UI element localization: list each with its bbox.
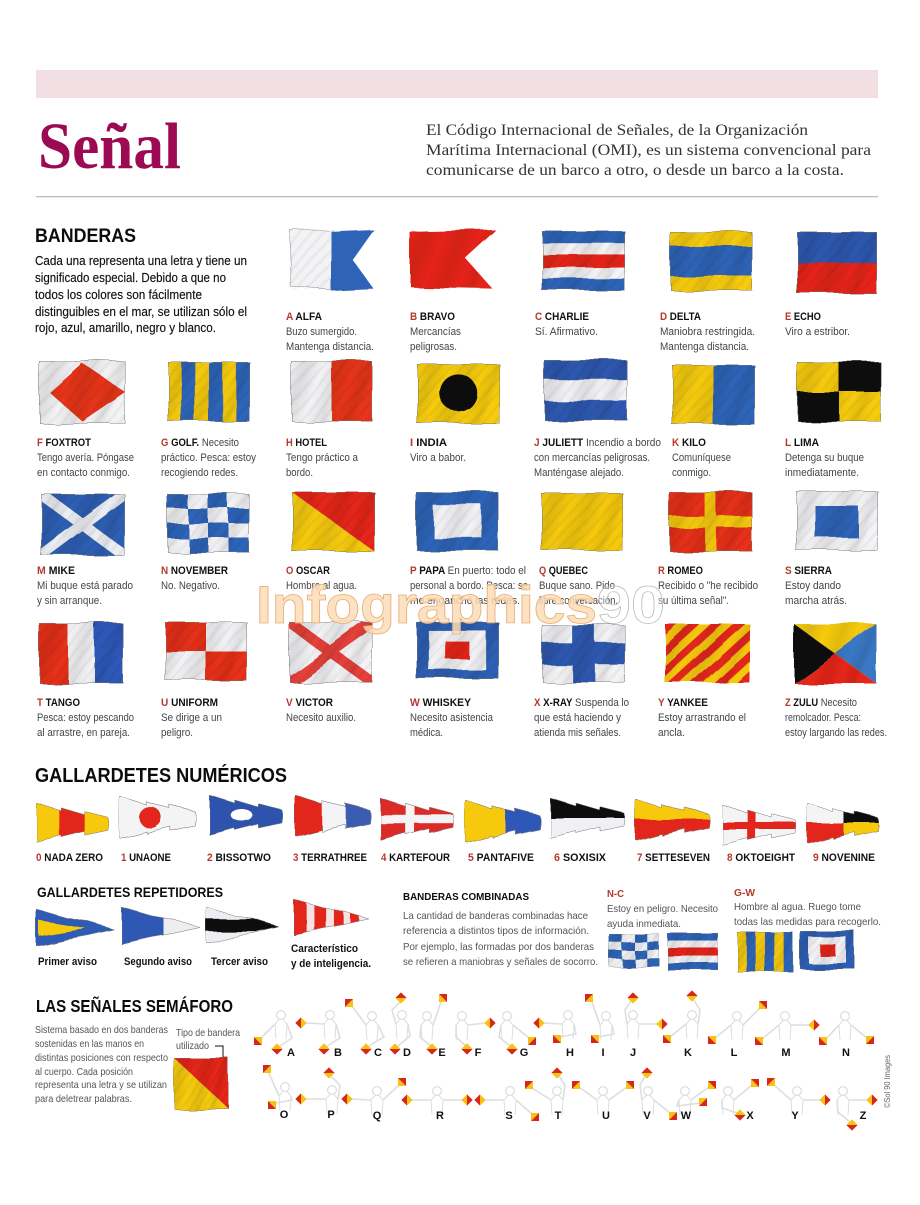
semaphore U: U: [602, 1110, 610, 1122]
flag card: S: [785, 491, 878, 607]
flag card: P: personal a bordo. Pesca: se: [410, 580, 528, 592]
flag card: I: [410, 364, 500, 464]
flag card: M: [37, 494, 133, 607]
flag card: A: [286, 229, 374, 353]
semaphore K: [663, 990, 700, 1059]
text block: semaforo: para deletrear palabras.: [35, 1093, 132, 1105]
semaphore D: [389, 992, 411, 1059]
pennant 8: 8 OKTOEIGHT: [727, 852, 795, 864]
flag card: A: A ALFA: [286, 311, 322, 323]
flag card: U: peligro.: [161, 727, 193, 739]
text block: banderas intro: significado especial. Debido a que no: [35, 271, 226, 285]
combo: N-C: ayuda inmediata.: [607, 918, 681, 930]
flag card: V: V VICTOR: [286, 697, 333, 709]
flag card: F: F FOXTROT: [37, 437, 91, 449]
flag card: G: recogiendo redes.: [161, 467, 238, 479]
semaphore M: [755, 1012, 820, 1059]
combo: G-W: [734, 887, 881, 972]
watermark: Infographics: [256, 576, 597, 635]
pennant 0: [36, 803, 109, 864]
flag card: O: Hombre al agua.: [286, 580, 357, 592]
semaphore B: B: [334, 1047, 342, 1059]
semaphore D: D: [403, 1047, 411, 1059]
flag card: T: T TANGO: [37, 697, 80, 709]
pennant 9: [807, 803, 879, 864]
flag card: X: [534, 625, 629, 739]
flag card: C: Sí. Afirmativo.: [535, 326, 598, 338]
pennant 5: 5 PANTAFIVE: [468, 852, 534, 864]
combo: N-C: N-C: [607, 888, 624, 900]
heading: Banderas: BANDERAS: [35, 226, 136, 247]
semaphore H: [533, 1011, 576, 1059]
semaphore X: [722, 1079, 759, 1122]
flag card: L: Detenga su buque: [785, 452, 864, 464]
flag card: S: S SIERRA: [785, 565, 832, 577]
flag card: J: con mercancías peligrosas.: [534, 452, 650, 464]
pennant 6: 6 SOXISIX: [554, 852, 607, 864]
semaphore L: [708, 1001, 767, 1059]
flag card: D: [660, 232, 755, 353]
flag card: W: W WHISKEY: [410, 697, 472, 709]
flag card: U: [161, 622, 247, 739]
header band: [36, 70, 878, 98]
pennant 0: 0 NADA ZERO: [36, 852, 103, 864]
banderas combinadas text: La cantidad de banderas combinadas hace: [403, 910, 588, 922]
text block: semaforo: Sistema basado en dos banderas: [35, 1024, 168, 1036]
semaphore S: S: [505, 1110, 513, 1122]
semaphore F: [456, 1012, 496, 1059]
flag card: U: Se dirige a un: [161, 712, 222, 724]
semaphore B: [295, 1011, 342, 1059]
pennant 4: [380, 798, 454, 864]
flag card: D: Maniobra restringida.: [660, 326, 755, 338]
pennant 7: 7 SETTESEVEN: [637, 852, 710, 864]
flag card: X: atienda mis señales.: [534, 727, 621, 739]
semaphore P: P: [327, 1109, 335, 1121]
semaphore E: [420, 994, 447, 1059]
flag card: G: práctico. Pesca: estoy: [161, 452, 257, 464]
flag card: Z: Z ZULU Necesito: [785, 697, 857, 709]
semaphore M: M: [781, 1047, 791, 1059]
combo: N-C: Estoy en peligro. Necesito: [607, 903, 718, 915]
pennant 2: [207, 795, 283, 864]
repeater: segundo aviso: Segundo aviso: [124, 956, 192, 968]
flag card: R: R ROMEO: [658, 565, 703, 577]
semaphore G: G: [520, 1047, 528, 1059]
banderas combinadas text: referencia a distintos tipos de información.: [403, 925, 589, 937]
repeater: tercer aviso: [206, 907, 279, 968]
flag card: P: me enganchó las redes.: [410, 595, 520, 607]
pennant 6: [550, 798, 625, 864]
semaphore E: E: [438, 1047, 446, 1059]
semaphore U: [572, 1081, 634, 1122]
flag card: Y: Y YANKEE: [658, 697, 708, 709]
semaphore F: F: [475, 1047, 482, 1059]
flag card: K: Comuníquese: [672, 452, 731, 464]
pennant 7: [635, 799, 710, 864]
flag card: H: bordo.: [286, 467, 313, 479]
flag card: S: Estoy dando: [785, 580, 841, 592]
flag card: C: [535, 231, 625, 338]
flag card: F: Tengo avería. Póngase: [37, 452, 134, 464]
flag card: R: [658, 492, 758, 607]
semaphore A: [254, 1011, 295, 1059]
text block: banderas intro: todos los colores son fácilmente: [35, 288, 202, 302]
semaphore O: O: [280, 1109, 289, 1121]
flag card: Q: Q QUEBEC: [539, 565, 588, 577]
combo: G-W: Hombre al agua. Ruego tome: [734, 901, 861, 913]
semaphore Q: Q: [373, 1110, 382, 1122]
banderas combinadas text: [403, 891, 598, 968]
flag card: K: K KILO: [672, 437, 706, 449]
repeater: primer aviso: [36, 909, 114, 968]
semaphore H: H: [566, 1047, 574, 1059]
flag card: B: B BRAVO: [410, 311, 455, 323]
flag card: S: marcha atrás.: [785, 595, 847, 607]
combo: G-W: todas las medidas para recogerlo.: [734, 916, 881, 928]
pennant 1: 1 UNAONE: [121, 852, 171, 864]
semaphore L: L: [731, 1047, 738, 1059]
flag card: E: Viro a estribor.: [785, 326, 850, 338]
flag card: Z: remolcador. Pesca:: [785, 712, 861, 724]
flag card: U: U UNIFORM: [161, 697, 218, 709]
repeater: primer aviso: Primer aviso: [38, 956, 97, 968]
semaphore C: C: [374, 1047, 382, 1059]
callout: tipo de bandera: Tipo de bandera: [176, 1027, 240, 1039]
flag card: R: su última señal".: [658, 595, 729, 607]
semaphore N: N: [842, 1047, 850, 1059]
flag card: R: Recibido o "he recibido: [658, 580, 758, 592]
flag card: I: I INDIA: [410, 437, 447, 449]
semaphore C: [345, 999, 384, 1059]
flag card: D: Mantenga distancia.: [660, 341, 749, 353]
semaphore Z: [837, 1087, 878, 1131]
text block: semaforo: distintas posiciones con respecto: [35, 1052, 168, 1064]
flag card: M: M MIKE: [37, 565, 75, 577]
flag card: Z: [785, 624, 887, 739]
banderas combinadas text: se refieren a maniobras y señales de socorro.: [403, 956, 598, 968]
semaphore P: [295, 1067, 340, 1121]
flag card: V: [286, 622, 372, 724]
pennant 3: [293, 795, 371, 864]
text block: banderas intro: distinguibles en el mar, se utilizan sólo el: [35, 305, 247, 319]
flag card: Y: ancla.: [658, 727, 685, 739]
flag card: G: [161, 362, 257, 479]
semaphore S: [474, 1087, 539, 1122]
intro text: [426, 122, 871, 179]
watermark: 90: [597, 576, 665, 635]
semaphore I: [585, 994, 614, 1059]
banderas combinadas text: BANDERAS COMBINADAS: [403, 891, 529, 903]
repeater: caracteristico: y de inteligencia.: [291, 958, 371, 970]
pennant 4: 4 KARTEFOUR: [381, 852, 450, 864]
pennant 5: [465, 800, 541, 864]
repeater: caracteristico: [291, 899, 371, 970]
pennant 1: [119, 796, 196, 864]
flag card: T: Pesca: estoy pescando: [37, 712, 134, 724]
flag card: P: P PAPA En puerto: todo el: [410, 565, 526, 577]
semaphore W: [677, 1081, 716, 1122]
semaphore V: [640, 1067, 677, 1122]
flag card: G: G GOLF. Necesito: [161, 437, 239, 449]
pennant 9: 9 NOVENINE: [813, 852, 875, 864]
intro text: El Código Internacional de Señales, de la Organización: [426, 122, 808, 139]
banderas combinadas text: Por ejemplo, las formadas por dos banderas: [403, 941, 594, 953]
semaphore J: [625, 992, 668, 1059]
flag card: M: y sin arranque.: [37, 595, 102, 607]
text block: semaforo: representa una letra y se utilizan: [35, 1079, 167, 1091]
combo: G-W: G-W: [734, 887, 755, 899]
pennant 3: 3 TERRATHREE: [293, 852, 367, 864]
flag card: O: [286, 492, 375, 592]
flag card: H: Tengo práctico a: [286, 452, 358, 464]
semaphore Y: [767, 1078, 831, 1122]
flag card: D: D DELTA: [660, 311, 701, 323]
flag card: W: [410, 622, 499, 739]
semaphore A: A: [287, 1047, 295, 1059]
flag card: Q: Buque sano. Pido: [539, 580, 615, 592]
flag card: H: [286, 361, 372, 479]
pennant 8: [722, 805, 796, 864]
flag card: K: [672, 365, 755, 479]
semaphore Q: [341, 1078, 406, 1122]
repeater: tercer aviso: Tercer aviso: [211, 956, 268, 968]
flag card: C: C CHARLIE: [535, 311, 589, 323]
heading: Gallardetes repetidores: GALLARDETES REPETIDORES: [37, 884, 223, 900]
callout: tipo de bandera: [174, 1027, 240, 1109]
flag card: J: [534, 360, 661, 479]
heading: Gallardetes numericos: GALLARDETES NUMÉRICOS: [35, 764, 287, 787]
flag card: V: Necesito auxilio.: [286, 712, 356, 724]
semaphore T: [525, 1067, 565, 1122]
flag card: Q: [539, 493, 623, 607]
flag card: T: al arrastre, en pareja.: [37, 727, 130, 739]
flag card: Z: estoy largando las redes.: [785, 727, 887, 739]
semaphore W: W: [681, 1110, 692, 1122]
text block: banderas intro: [35, 254, 247, 335]
repeater: caracteristico: Característico: [291, 943, 358, 955]
semaphore V: V: [643, 1110, 651, 1122]
text block: banderas intro: rojo, azul, amarillo, negro y blanco.: [35, 321, 216, 335]
flag card: X: que está haciendo y: [534, 712, 622, 724]
flag card: L: [785, 362, 881, 479]
flag card: L: L LIMA: [785, 437, 819, 449]
semaphore N: [819, 1012, 874, 1059]
flag card: E: E ECHO: [785, 311, 821, 323]
flag card: A: Mantenga distancia.: [286, 341, 374, 353]
flag card: W: Necesito asistencia: [410, 712, 493, 724]
semaphore O: [263, 1065, 292, 1121]
credit: ©Sol 90 Images: [882, 1055, 892, 1108]
flag card: A: Buzo sumergido.: [286, 326, 357, 338]
flag card: N: No. Negativo.: [161, 580, 220, 592]
semaphore J: J: [630, 1047, 636, 1059]
flag card: I: Viro a babor.: [410, 452, 466, 464]
flag card: Y: [658, 624, 750, 739]
flag card: N: N NOVEMBER: [161, 565, 228, 577]
text block: semaforo: [35, 1024, 168, 1105]
flag card: F: en contacto conmigo.: [37, 467, 130, 479]
semaphore R: [401, 1087, 473, 1122]
semaphore T: T: [555, 1110, 562, 1122]
flag card: B: Mercancías: [410, 326, 462, 338]
flag card: Q: libre conversación.: [539, 595, 618, 607]
semaphore K: K: [684, 1047, 692, 1059]
flag card: Y: Estoy arrastrando el: [658, 712, 746, 724]
semaphore X: X: [746, 1110, 754, 1122]
heading: Las senales semaforo: LAS SEÑALES SEMÁFORO: [36, 995, 233, 1016]
semaphore Y: Y: [791, 1110, 799, 1122]
text block: semaforo: al cuerpo. Cada posición: [35, 1066, 133, 1078]
title: Señal: [38, 110, 181, 183]
flag card: B: [410, 230, 496, 353]
flag card: F: [37, 361, 134, 479]
flag card: K: conmigo.: [672, 467, 711, 479]
flag card: O: O OSCAR: [286, 565, 330, 577]
semaphore Z: Z: [860, 1110, 867, 1122]
text block: semaforo: sostenidas en las manos en: [35, 1038, 144, 1050]
semaphore R: R: [436, 1110, 444, 1122]
flag card: P: [410, 492, 528, 607]
flag card: J: Manténgase alejado.: [534, 467, 624, 479]
flag card: E: [785, 232, 877, 338]
callout: tipo de bandera: utilizado: [176, 1040, 209, 1052]
flag card: W: médica.: [410, 727, 443, 739]
flag card: H: H HOTEL: [286, 437, 327, 449]
flag card: L: inmediatamente.: [785, 467, 859, 479]
flag card: X: X X-RAY Suspenda lo: [534, 697, 629, 709]
flag card: T: [37, 623, 134, 739]
intro text: Marítima Internacional (OMI), es un sistema convencional para: [426, 142, 871, 159]
repeater: segundo aviso: [121, 907, 200, 968]
combo: N-C: [607, 888, 718, 970]
semaphore I: I: [601, 1047, 605, 1059]
pennant 2: 2 BISSOTWO: [207, 852, 271, 864]
intro text: comunicarse de un barco a otro, o desde un barco a la costa.: [426, 162, 844, 179]
flag card: B: peligrosas.: [410, 341, 457, 353]
flag card: N: [161, 494, 249, 592]
semaphore G: [499, 1012, 536, 1059]
flag card: M: Mi buque está parado: [37, 580, 133, 592]
flag card: J: J JULIETT Incendio a bordo: [534, 437, 661, 449]
text block: banderas intro: Cada una representa una letra y tiene un: [35, 254, 247, 268]
